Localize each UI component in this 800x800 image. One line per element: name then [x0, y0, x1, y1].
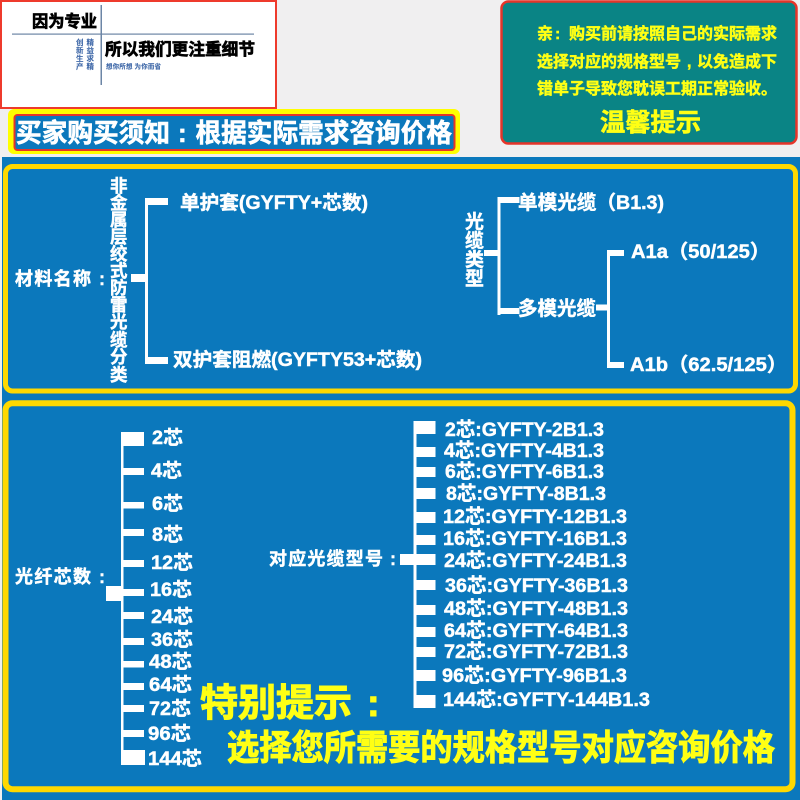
list: cable models: 8芯:GYFTY-8B1.3 — [446, 483, 606, 505]
label: corresponding model: : — [390, 549, 396, 569]
list: cable models: 64芯:GYFTY-64B1.3 — [444, 620, 628, 642]
list: cable models: 72芯:GYFTY-72B1.3 — [444, 641, 628, 663]
vertical label: cable classification: 金 — [110, 193, 128, 213]
item: A1b: A1b（62.5/125） — [630, 354, 787, 376]
vertical slogan: precision: 产 — [76, 61, 84, 71]
list: cable models: 6芯:GYFTY-6B1.3 — [445, 461, 604, 483]
label: corresponding model: 对应光缆型号 — [269, 548, 383, 569]
title banner: buyer notice: : — [178, 118, 187, 148]
vertical label: cable classification: 绞 — [110, 244, 128, 264]
vertical label: cable classification: 层 — [110, 227, 128, 247]
list: fiber counts: 2芯 — [152, 427, 183, 449]
vertical label: cable classification: 分 — [110, 347, 128, 367]
list: fiber counts: 72芯 — [149, 698, 191, 720]
vertical label: cable type — [465, 211, 484, 290]
vertical label: cable classification: 雷 — [110, 295, 128, 315]
heading: because professional: 因为专业 — [32, 12, 97, 31]
vertical label: cable classification: 类 — [110, 365, 128, 385]
vertical label: cable classification: 缆 — [110, 330, 128, 350]
tree connector: fiber count — [106, 432, 145, 765]
label: material name: 材料名称 — [15, 269, 91, 289]
label: fiber count: : — [99, 567, 105, 587]
callout: special notice: : — [367, 683, 380, 725]
item: double sheath: 双护套阻燃(GYFTY53+芯数) — [173, 349, 422, 371]
reminder text: 错单子导致您耽误工期正常验收。 — [537, 79, 777, 98]
tree connector: model — [400, 421, 436, 708]
list: fiber counts — [148, 427, 202, 770]
list: fiber counts: 16芯 — [150, 579, 192, 601]
reminder text: 选择对应的规格型号 — [537, 52, 681, 71]
list: cable models: 144芯:GYFTY-144B1.3 — [443, 689, 650, 711]
vertical label: cable type: 型 — [465, 268, 484, 290]
vertical slogan: precision: 生 — [76, 53, 84, 63]
list: cable models: 96芯:GYFTY-96B1.3 — [442, 665, 627, 687]
list: fiber counts: 48芯 — [149, 651, 192, 673]
tree connector: cable type — [484, 197, 624, 368]
list: cable models — [442, 419, 650, 711]
list: cable models: 12芯:GYFTY-12B1.3 — [443, 506, 627, 528]
vertical slogan: precision: 求 — [86, 53, 94, 63]
vertical label: cable classification: 防 — [110, 278, 128, 298]
vertical slogan: precision: 创 — [76, 37, 84, 47]
list: fiber counts: 12芯 — [151, 552, 193, 574]
item: multimode: 多模光缆 — [518, 297, 596, 320]
title banner: buyer notice: 根据实际需求咨询价格 — [196, 118, 452, 148]
list: cable models: 2芯:GYFTY-2B1.3 — [445, 419, 604, 441]
vertical label: cable classification: 光 — [110, 312, 128, 332]
list: fiber counts: 64芯 — [149, 674, 192, 696]
reminder text — [537, 24, 777, 98]
reminder heading: 温馨提示 — [600, 109, 701, 137]
list: fiber counts: 144芯 — [148, 748, 202, 770]
vertical label: cable type: 类 — [465, 249, 484, 271]
vertical label: cable type: 缆 — [465, 230, 484, 252]
vertical label: cable classification: 非 — [110, 176, 128, 196]
list: cable models: 48芯:GYFTY-48B1.3 — [444, 598, 628, 620]
panel: fiber count and model — [6, 403, 792, 789]
callout: special notice: 特别提示 — [200, 683, 352, 725]
list: cable models: 36芯:GYFTY-36B1.3 — [445, 575, 628, 597]
list: fiber counts: 6芯 — [152, 493, 183, 515]
vertical label: cable type: 光 — [465, 211, 484, 233]
label: material name: : — [99, 269, 105, 289]
small slogan: 想你所想 为你而省 — [106, 62, 162, 70]
vertical slogan: precision: 精 — [86, 61, 94, 71]
vertical slogan: precision — [76, 37, 94, 71]
panel: material and cable type — [6, 166, 796, 391]
vertical label: cable classification: 属 — [110, 210, 128, 230]
reminder text: 亲 — [537, 24, 553, 43]
list: fiber counts: 4芯 — [151, 460, 182, 482]
vertical slogan: precision: 精 — [86, 37, 94, 47]
tree connector: material — [131, 198, 168, 364]
reminder text: , — [687, 54, 691, 71]
label: fiber count: 光纤芯数 — [15, 567, 91, 587]
item: single mode: 单模光缆（B1.3) — [518, 191, 664, 214]
reminder text: 购买前请按照自己的实际需求 — [569, 24, 777, 43]
list: fiber counts: 36芯 — [151, 629, 193, 651]
panel: brand banner — [1, 1, 276, 108]
heading: attention to detail: 所以我们更注重细节 — [105, 39, 255, 59]
list: fiber counts: 8芯 — [152, 524, 183, 546]
list: fiber counts: 96芯 — [148, 723, 191, 745]
list: cable models: 16芯:GYFTY-16B1.3 — [443, 528, 627, 550]
list: cable models: 24芯:GYFTY-24B1.3 — [444, 550, 627, 572]
vertical slogan: precision: 新 — [76, 45, 84, 55]
reminder text: 以免造成下 — [697, 52, 777, 71]
list: fiber counts: 24芯 — [151, 606, 193, 628]
title banner: buyer notice: 买家购买须知 — [16, 118, 170, 148]
vertical label: cable classification — [110, 176, 128, 385]
panel: warm reminder — [502, 2, 796, 144]
item: A1a: A1a（50/125） — [631, 241, 770, 263]
vertical label: cable classification: 式 — [110, 261, 128, 281]
vertical slogan: precision: 益 — [86, 45, 94, 55]
reminder text: : — [555, 26, 560, 43]
title banner: buyer notice — [8, 109, 460, 154]
list: cable models: 4芯:GYFTY-4B1.3 — [444, 440, 604, 462]
item: single sheath: 单护套(GYFTY+芯数) — [180, 192, 368, 214]
